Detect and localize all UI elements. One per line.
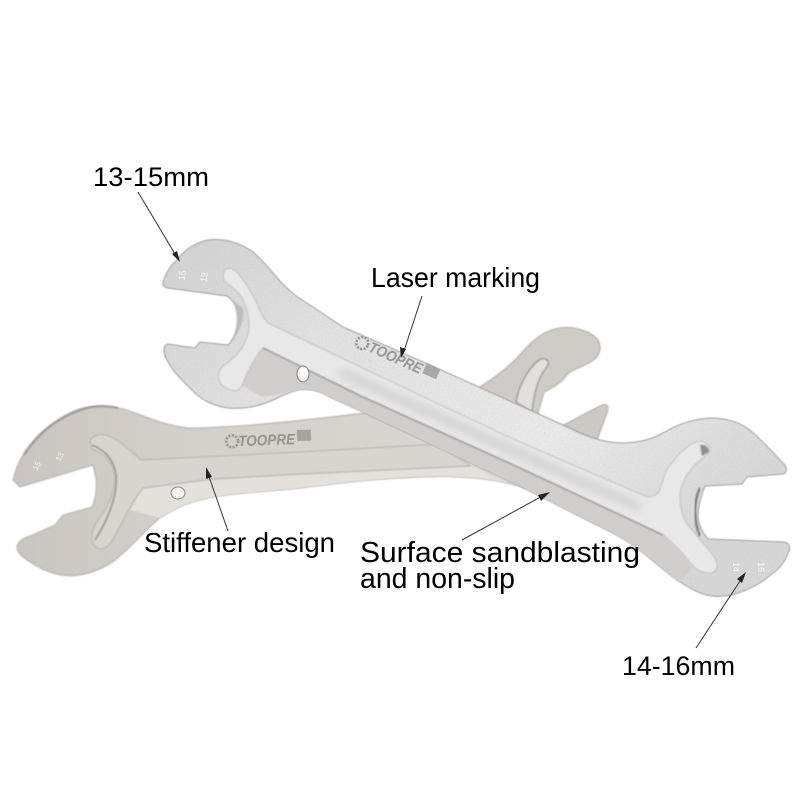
- front wrench stiffener rib: [219, 269, 717, 573]
- rear wrench: [13, 328, 608, 576]
- callout: 14-16mm: 14-16mm: [622, 651, 735, 681]
- far head, rib: [516, 359, 548, 412]
- front wrench hole: [297, 366, 309, 382]
- rear logo: [226, 430, 311, 451]
- far head, lower jaw: [562, 405, 608, 440]
- callout: 14-16mm: [622, 572, 746, 681]
- callout: surface sandblasting: and non-slip: [360, 563, 515, 595]
- callout: 13-15mm: 13-15mm: [93, 162, 209, 192]
- rear wrench hole: [171, 487, 185, 499]
- callout: stiffener design: [144, 467, 335, 558]
- front logo: TOOPRE: [366, 339, 426, 378]
- rear wrench top highlight edge: [24, 406, 118, 455]
- callout: surface sandblasting: [360, 492, 640, 595]
- callout: surface sandblasting: Surface sandblasting: [360, 537, 640, 569]
- rear wrench jaw shadow: [92, 445, 116, 540]
- callout: 13-15mm: [93, 162, 209, 262]
- rear wrench body: [13, 406, 530, 576]
- front wrench numbers: [176, 270, 766, 572]
- callout: stiffener design: Stiffener design: [144, 527, 335, 558]
- right jaw inner shadow: [695, 488, 700, 536]
- callout: laser marking: [371, 262, 540, 358]
- callout: laser marking: Laser marking: [371, 262, 540, 293]
- rear wrench lower strip: [130, 466, 520, 518]
- front wrench numbers: 14: [731, 562, 741, 572]
- far head, upper jaw: [470, 328, 600, 420]
- front wrench lower flange: [242, 348, 693, 582]
- front wrench numbers: 13: [198, 272, 210, 283]
- rear wrench numbers: 15: [31, 459, 43, 472]
- rear wrench numbers: [31, 450, 66, 472]
- front wrench body: [163, 240, 790, 596]
- left jaw inner face: [228, 300, 244, 345]
- front logo: [353, 333, 440, 385]
- right jaw rib tip shadow: [700, 445, 709, 456]
- front wrench: [163, 240, 790, 596]
- front wrench crease line: [263, 348, 663, 535]
- rear logo: TOOPRE: [238, 431, 296, 450]
- rib grainy shading: [340, 372, 640, 508]
- rear wrench stiffener rib: [90, 435, 470, 549]
- front wrench numbers: 16: [756, 562, 766, 572]
- rear wrench numbers: 13: [54, 450, 66, 463]
- front wrench numbers: 15: [176, 270, 188, 281]
